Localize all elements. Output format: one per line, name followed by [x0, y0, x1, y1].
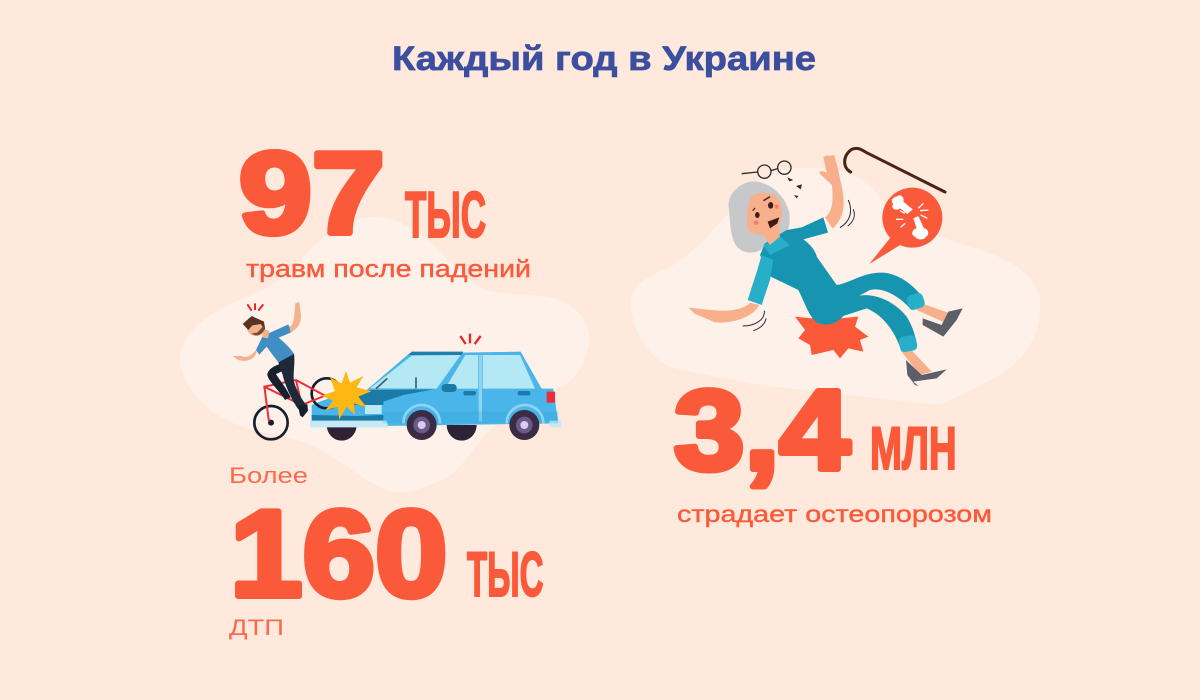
unit: тыс (97): ТЫС [405, 180, 486, 252]
arm up [819, 155, 844, 229]
hair [729, 182, 790, 253]
leg rear skin [917, 303, 950, 323]
unit: млн: МЛН [870, 414, 957, 482]
title: Каждый год в Украине [392, 40, 816, 78]
car rear wheel [509, 410, 539, 440]
sleeve [748, 255, 773, 305]
stat: 160: 160 [230, 484, 448, 622]
bubble: broken bone [869, 188, 942, 264]
arm left [688, 303, 759, 323]
illustration: cyclist and car collision [233, 302, 562, 441]
neck [760, 223, 780, 245]
shards [787, 177, 802, 198]
motion lines [743, 200, 854, 331]
background blob: right [631, 168, 1040, 405]
crash star [322, 371, 372, 419]
car rear-side wheels [327, 425, 477, 441]
label: road accidents: ДТП [229, 615, 284, 640]
stat: 97: 97 [239, 129, 385, 258]
caption: falls: травм после падений [246, 256, 531, 283]
background blob: left [180, 217, 589, 492]
caption: osteoporosis: страдает остеопорозом [677, 501, 992, 527]
shoe rear [923, 308, 963, 337]
cane [845, 148, 945, 192]
illustration: falling elderly woman [688, 148, 963, 386]
face [747, 193, 782, 235]
unit: тыс (160): ТЫС [467, 538, 543, 610]
car front wheel [407, 410, 437, 440]
stat: 3,4: 3,4 [674, 367, 850, 493]
facial features [753, 197, 779, 228]
cyclist [233, 302, 308, 417]
car body [310, 352, 562, 427]
shoe front [906, 360, 947, 386]
glasses [742, 161, 791, 178]
impact burst [795, 313, 868, 358]
label: more than: Более [229, 463, 308, 488]
cuffs [763, 237, 926, 353]
alert marks: car [460, 334, 481, 344]
leg front skin [902, 348, 932, 375]
alert marks: cyclist [247, 303, 263, 311]
bicycle [254, 378, 342, 439]
body [760, 217, 923, 352]
